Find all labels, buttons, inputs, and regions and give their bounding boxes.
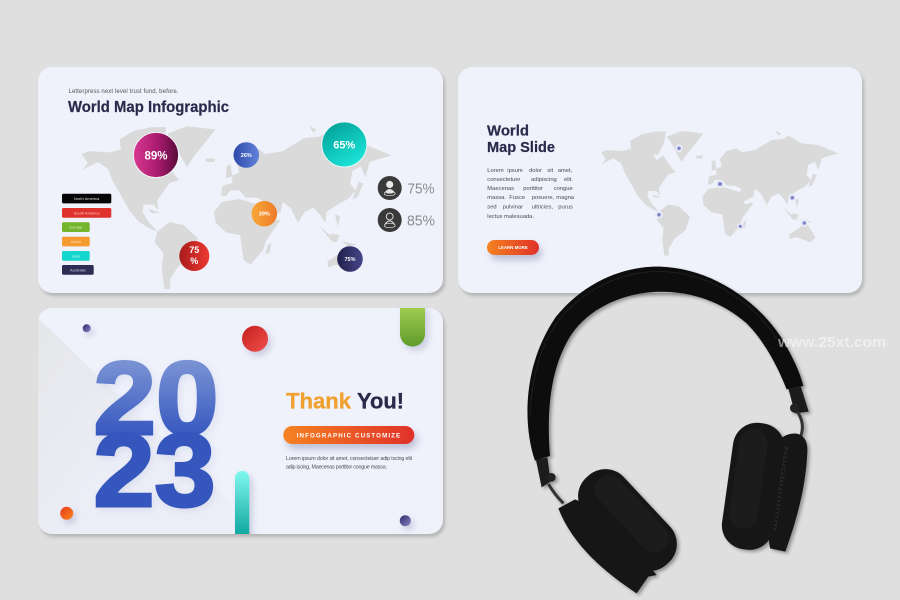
- year 2023: 20: [94, 341, 218, 457]
- paragraph: adipiscing: [531, 177, 557, 183]
- left arm: [536, 457, 563, 503]
- stat: 75% with icon: 75%: [408, 180, 434, 198]
- heading: Thank You!: Thank: [286, 388, 352, 414]
- panel: world map slide: [458, 67, 862, 293]
- legend: [62, 194, 111, 275]
- legend: South America: [74, 210, 100, 215]
- paragraph: ultricies,: [532, 204, 553, 210]
- button: infographic customize: INFOGRAPHIC CUSTOMIZE: [297, 432, 400, 439]
- heading: Thank You!: You!: [357, 388, 404, 414]
- paragraph: porttitor: [523, 186, 543, 192]
- stat: 75% with icon: [378, 176, 434, 200]
- stat: 85% with icon: [378, 208, 435, 232]
- button: learn more: [487, 240, 539, 255]
- world map: [82, 125, 392, 289]
- green tab: [400, 305, 425, 346]
- paragraph: massa.: [487, 195, 506, 201]
- legend: Africa: [71, 239, 82, 244]
- subtitle: Letterpress next level trust fund, before.: [68, 89, 179, 95]
- bubble: 39%: 39%: [259, 212, 270, 218]
- bubble: 89%: [134, 132, 178, 178]
- paragraph: ipsum: [507, 168, 523, 174]
- paragraph: elit.: [564, 177, 573, 183]
- teal pill: [235, 471, 249, 540]
- year 2023: [94, 341, 218, 529]
- heading: World Map Infographic: World Map Infographic: [68, 99, 229, 116]
- legend: North America: [74, 196, 100, 201]
- headband: [527, 267, 803, 461]
- legend: Asia: [72, 253, 80, 258]
- bubble: 26%: [234, 142, 259, 168]
- paragraph: [286, 456, 412, 471]
- paragraph: amet,: [558, 168, 573, 174]
- world map with pins: [601, 130, 838, 256]
- panel: world map infographic: [38, 67, 443, 293]
- paragraph: adip iscing, Maecenas porttitor congue massa.: [286, 465, 387, 471]
- paragraph: magna: [556, 195, 575, 201]
- ball: purple: [400, 515, 411, 526]
- right arm: [788, 386, 809, 437]
- legend: Europe: [69, 225, 83, 230]
- paragraph: sit: [547, 168, 553, 174]
- ball: orange: [60, 507, 73, 520]
- bubble: 65%: [322, 122, 367, 167]
- paragraph: sed: [487, 204, 497, 210]
- year 2023: 23: [94, 413, 216, 529]
- button: infographic customize: [283, 426, 414, 444]
- paragraph: Fusce: [509, 195, 525, 201]
- panel: thank you 2023: [38, 305, 443, 540]
- paragraph: Lorem ipsum dolor sit amet, consectetuer adip iscing elit: [286, 456, 412, 462]
- ball: red: [242, 326, 268, 352]
- left ear cup: [558, 459, 687, 593]
- paragraph: posuere,: [532, 195, 555, 201]
- legend: Australia: [70, 267, 86, 272]
- heading: World Map Slide: World: [487, 124, 529, 140]
- watermark: www.25xt.com: [777, 335, 886, 351]
- paragraph: congue: [554, 186, 573, 192]
- stat: 85% with icon: 85%: [407, 212, 435, 230]
- paragraph: dolor: [529, 168, 542, 174]
- paragraph: purus: [558, 204, 573, 210]
- paragraph: lectus malesuada.: [487, 214, 534, 220]
- paragraph: pulvinar: [503, 204, 523, 210]
- bubble: 89%: 89%: [144, 150, 168, 162]
- headphones: [527, 267, 809, 593]
- paragraph: [487, 168, 575, 220]
- button: learn more: LEARN MORE: [498, 245, 528, 250]
- heading: World Map Slide: Map Slide: [487, 140, 555, 156]
- bubble: 75% south america: [179, 241, 209, 271]
- bubble: 75% australia: 75%: [344, 257, 356, 263]
- paragraph: consectetuer: [487, 177, 521, 183]
- bubble: 75% south america: %: [190, 256, 198, 266]
- right ear cup: [719, 420, 807, 553]
- bubble: 75% south america: 75: [189, 245, 199, 255]
- paragraph: Lorem: [487, 168, 504, 174]
- bubble: 26%: 26%: [241, 153, 252, 159]
- bubble: 65%: 65%: [333, 140, 356, 152]
- paragraph: Maecenas: [487, 186, 514, 192]
- heading: World Map Slide: [487, 124, 555, 156]
- ball: small purple: [83, 324, 91, 332]
- bubble: 39%: [251, 201, 277, 226]
- bubble: 75% australia: [337, 246, 363, 272]
